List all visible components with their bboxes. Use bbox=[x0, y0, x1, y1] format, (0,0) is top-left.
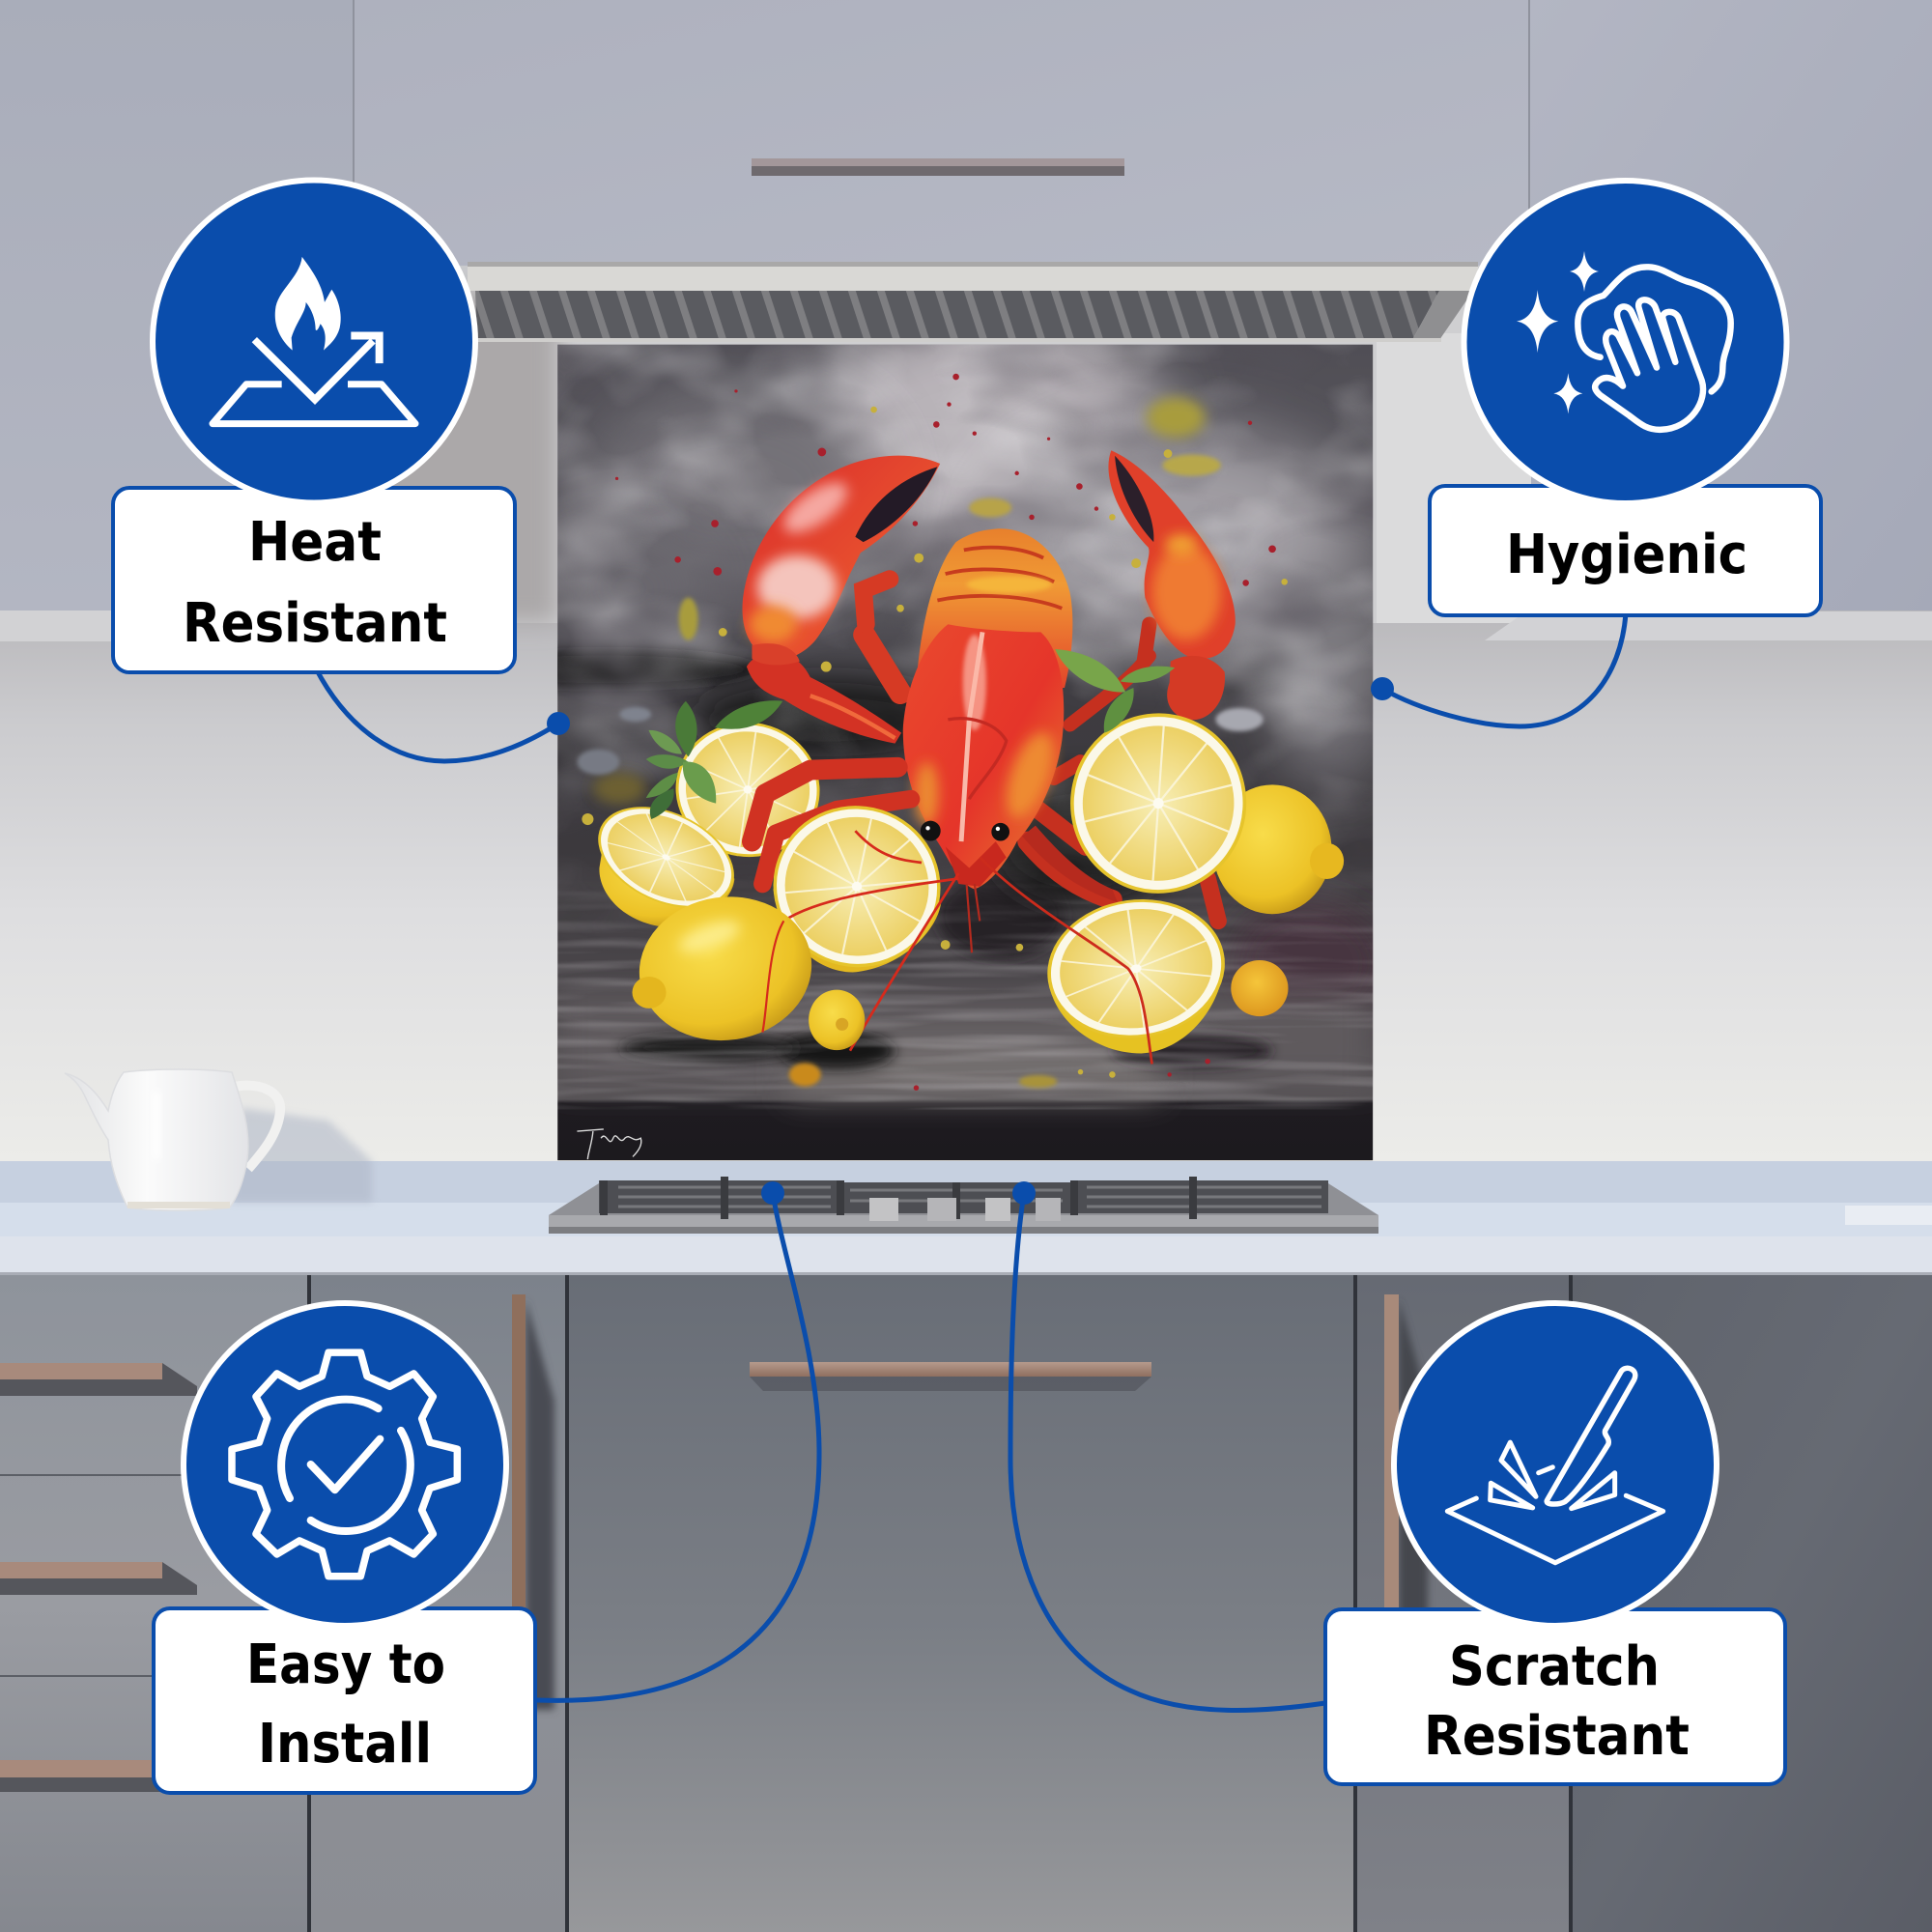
label: heat resistant bbox=[113, 488, 515, 672]
connector: easy to install bbox=[537, 1193, 819, 1700]
upper cabinet handle bbox=[752, 158, 1124, 176]
cabinet trim left bbox=[0, 611, 386, 641]
lower cabinets bbox=[0, 1275, 1932, 1932]
smoky background bbox=[450, 312, 1388, 1109]
small orange lemon bbox=[1231, 960, 1289, 1016]
countertop bbox=[0, 1161, 1932, 1275]
leaves bbox=[646, 649, 1175, 819]
badge: heat resistant icon bbox=[153, 180, 475, 502]
half lemon bottom right bbox=[980, 858, 1234, 1064]
label: hygienic bbox=[1430, 486, 1821, 615]
connector: scratch resistant bbox=[1010, 1193, 1325, 1711]
label: scratch resistant: Resistant bbox=[1424, 1705, 1690, 1768]
connector dot: heat resistant bbox=[547, 712, 570, 735]
gas hob bbox=[549, 1177, 1378, 1234]
label: easy to install: Easy to bbox=[246, 1634, 445, 1696]
small lemon bbox=[809, 990, 865, 1050]
cabinet handles bbox=[0, 1294, 1428, 1792]
whole lemon right bbox=[1213, 784, 1344, 914]
badge: hygienic icon bbox=[1464, 181, 1787, 503]
label: scratch resistant: Scratch bbox=[1449, 1635, 1660, 1698]
callout: easy to install bbox=[154, 1181, 819, 1793]
badge: scratch resistant icon bbox=[1394, 1303, 1717, 1626]
label: heat resistant: Heat bbox=[248, 511, 382, 574]
tiled wall bbox=[0, 611, 1932, 1163]
tail shell bbox=[916, 528, 1072, 688]
label: scratch resistant bbox=[1325, 1609, 1785, 1784]
white jug bbox=[65, 1069, 372, 1210]
half lemon left bbox=[598, 807, 734, 926]
large lemon slice right bbox=[1070, 713, 1246, 894]
back legs bbox=[864, 580, 1218, 921]
centre antennae bbox=[967, 884, 980, 952]
antenna over lemon bbox=[762, 921, 783, 1033]
right front legs behind lemon bbox=[1022, 826, 1118, 902]
label: easy to install bbox=[154, 1608, 535, 1793]
carapace bbox=[903, 548, 1064, 889]
whole lemon bottom left bbox=[632, 896, 811, 1041]
back lemon slice bbox=[676, 723, 820, 858]
label: easy to install: Install bbox=[258, 1713, 432, 1776]
artist signature bbox=[577, 1129, 641, 1159]
connector dot: hygienic bbox=[1371, 677, 1394, 700]
cabinet trim right bbox=[1485, 611, 1932, 640]
yellow dust flecks bbox=[582, 407, 1288, 1078]
left claw bbox=[743, 456, 940, 744]
connector: hygienic bbox=[1382, 613, 1626, 726]
upper cabinets bbox=[0, 0, 1932, 611]
callout: scratch resistant bbox=[1010, 1181, 1785, 1784]
paint splatter bbox=[615, 374, 1276, 1091]
callout: hygienic bbox=[1371, 181, 1821, 726]
badge: easy to install icon bbox=[184, 1303, 506, 1626]
label: hygienic: Hygienic bbox=[1506, 524, 1747, 586]
connector dot: easy to install bbox=[761, 1181, 784, 1205]
lobster and lemon painting panel bbox=[557, 344, 1374, 1161]
label: heat resistant: Resistant bbox=[183, 592, 447, 655]
connector: heat resistant bbox=[316, 668, 558, 761]
extractor hood bbox=[468, 262, 1478, 342]
lemon half centre bbox=[773, 806, 960, 1051]
connector dot: scratch resistant bbox=[1012, 1181, 1036, 1205]
left front legs bbox=[752, 767, 911, 884]
callout: heat resistant bbox=[113, 180, 570, 761]
right claw bbox=[1108, 450, 1236, 720]
wall behind hood bbox=[354, 290, 1531, 623]
